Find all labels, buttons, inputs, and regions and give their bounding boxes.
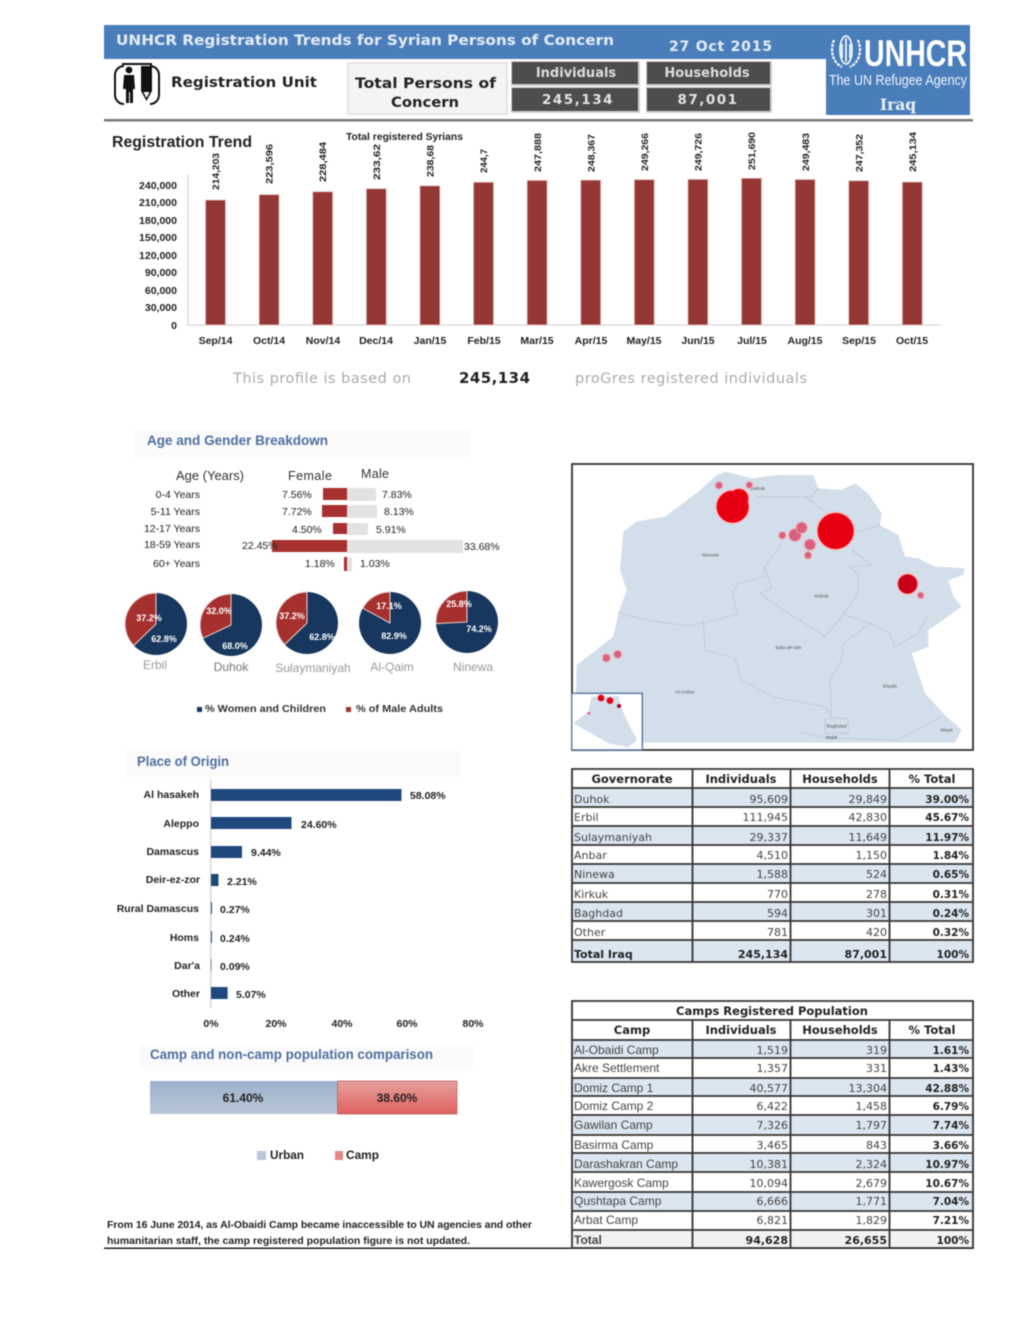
row: Gawilan Camp: 1,797 bbox=[856, 1119, 887, 1132]
row: Kawergosk Camp: Kawergosk Camp bbox=[574, 1176, 669, 1190]
row: Erbil: 45.67% bbox=[925, 812, 969, 824]
y axis labels: 0 bbox=[171, 320, 177, 332]
row: Duhok: Duhok bbox=[574, 793, 610, 806]
bar value labels: 251,690 bbox=[747, 132, 758, 170]
map circles: camp locations bbox=[602, 482, 924, 662]
row: Anbar: 1,150 bbox=[856, 849, 887, 862]
percentage labels: 1.18% bbox=[305, 558, 335, 570]
row: Domiz Camp 1: 13,304 bbox=[848, 1082, 887, 1095]
row: Darashakran Camp: 2,324 bbox=[856, 1158, 887, 1171]
heading: registration trend: Registration Trend bbox=[112, 134, 252, 151]
footnote: From 16 June 2014, as Al-Obaidi Camp became inaccessible to UN agencies and other bbox=[107, 1219, 532, 1231]
row: Kirkuk: Kirkuk bbox=[574, 888, 609, 901]
row: Other: 0.32% bbox=[933, 927, 969, 939]
pie: Al-Qaim: Al-Qaim bbox=[370, 660, 414, 674]
header row: Governorate bbox=[591, 772, 673, 786]
row: Ninewa: 1,588 bbox=[756, 868, 788, 881]
row: Domiz Camp 2: Domiz Camp 2 bbox=[574, 1099, 654, 1113]
origin values: 0.09% bbox=[220, 961, 250, 973]
age labels: 18-59 Years bbox=[144, 539, 200, 551]
origin values: 0.24% bbox=[220, 933, 250, 945]
header row: Individuals bbox=[705, 772, 777, 786]
total persons of concern box: Total Persons of bbox=[355, 76, 497, 92]
row: Duhok: 39.00% bbox=[925, 794, 969, 806]
row: Anbar bbox=[574, 849, 969, 862]
pie: Ninewa bbox=[436, 591, 498, 674]
origin labels: Rural Damascus bbox=[117, 903, 199, 915]
row: Duhok bbox=[574, 793, 969, 806]
percentage labels: 7.72% bbox=[282, 506, 312, 518]
origin axis labels: 40% bbox=[331, 1018, 353, 1030]
map of northern Iraq: Kirkuk bbox=[815, 593, 829, 599]
bar value labels: 248,367 bbox=[586, 134, 598, 172]
bar value labels: 247,888 bbox=[533, 133, 544, 172]
header row: Households bbox=[802, 772, 878, 786]
stacked bar: urban: 61.40% bbox=[223, 1091, 264, 1105]
profile note: This profile is based on bbox=[232, 371, 411, 387]
total persons of concern box bbox=[347, 62, 508, 115]
column headings: Female bbox=[288, 469, 332, 483]
pie: Duhok bbox=[200, 594, 262, 674]
age labels: 0-4 Years bbox=[156, 489, 200, 501]
percentage labels: 1.03% bbox=[360, 558, 390, 570]
row: Al-Obaidi Camp: 319 bbox=[866, 1044, 887, 1057]
column headings: Male bbox=[361, 467, 389, 481]
origin values: 58.08% bbox=[410, 790, 446, 802]
footnote: humanitarian staff, the camp registered population figure is not updated. bbox=[107, 1235, 470, 1247]
row: Erbil bbox=[574, 811, 969, 824]
bar value labels: 249,483 bbox=[801, 133, 812, 171]
individuals value bbox=[511, 87, 640, 113]
pie: Duhok: 68.0% bbox=[222, 641, 248, 651]
age labels bbox=[144, 489, 200, 570]
header row bbox=[614, 1023, 955, 1037]
x axis labels bbox=[199, 335, 928, 347]
map of northern Iraq bbox=[572, 472, 965, 750]
row: Basirma Camp: 843 bbox=[866, 1139, 887, 1152]
percentage labels: 8.13% bbox=[384, 506, 414, 518]
row: Total Iraq: 100% bbox=[937, 949, 969, 961]
row: Darashakran Camp: Darashakran Camp bbox=[574, 1157, 678, 1171]
row: Total: Total bbox=[574, 1233, 602, 1247]
pie: Ninewa: Ninewa bbox=[453, 660, 493, 674]
registration unit label: Registration Unit bbox=[171, 75, 317, 91]
y axis labels: 60,000 bbox=[145, 285, 177, 297]
heading: age and gender: Age and Gender Breakdown bbox=[147, 433, 328, 448]
row: Duhok: 95,609 bbox=[750, 793, 788, 806]
percentage labels: 5.91% bbox=[376, 524, 406, 536]
UNHCR logo block: Iraq bbox=[880, 95, 916, 114]
origin values: 0.27% bbox=[220, 904, 250, 916]
bar value labels: 249,726 bbox=[694, 133, 704, 171]
row: Basirma Camp: 3.66% bbox=[933, 1140, 969, 1152]
row: Akre Settlement: Akre Settlement bbox=[574, 1061, 660, 1075]
map of northern Iraq: Al-Anbar bbox=[675, 689, 695, 695]
origin values: 24.60% bbox=[301, 819, 337, 831]
row: Total Iraq: 245,134 bbox=[738, 948, 788, 961]
row: Erbil: 42,830 bbox=[848, 811, 887, 824]
x axis labels: Jan/15 bbox=[414, 335, 446, 347]
row: Baghdad bbox=[574, 907, 969, 920]
individuals header bbox=[511, 61, 640, 86]
row: Domiz Camp 2 bbox=[574, 1099, 969, 1113]
footnote bbox=[107, 1219, 532, 1247]
header row: % Total bbox=[909, 1023, 955, 1037]
y axis labels: 210,000 bbox=[139, 197, 177, 209]
map of northern Iraq: Babil bbox=[826, 735, 837, 741]
origin labels bbox=[117, 789, 200, 1000]
pie: Erbil bbox=[125, 593, 187, 672]
row: Akre Settlement: 331 bbox=[866, 1062, 887, 1075]
row: Domiz Camp 2: 6,422 bbox=[756, 1100, 788, 1113]
pie: Al-Qaim: 82.9% bbox=[381, 631, 407, 641]
profile note: proGres registered individuals bbox=[575, 371, 807, 387]
x axis labels: Jul/15 bbox=[737, 335, 767, 347]
x axis labels: Sep/15 bbox=[842, 335, 876, 347]
header row: Individuals bbox=[705, 1023, 777, 1037]
table: governorate bbox=[572, 769, 973, 962]
header row: Camp bbox=[614, 1023, 650, 1037]
row: Al-Obaidi Camp bbox=[574, 1043, 969, 1057]
column headings: Age (Years) bbox=[176, 469, 244, 483]
row: Other: Other bbox=[574, 926, 606, 939]
origin labels: Homs bbox=[170, 932, 199, 944]
female bars bbox=[272, 488, 347, 571]
origin bars bbox=[211, 789, 402, 999]
row: Ninewa bbox=[574, 868, 969, 881]
x axis labels: Sep/14 bbox=[199, 335, 233, 347]
row: Sulaymaniyah bbox=[574, 831, 969, 844]
origin values: 9.44% bbox=[251, 847, 281, 859]
row: Domiz Camp 2: 6.79% bbox=[933, 1101, 969, 1113]
pie: Erbil: 37.2% bbox=[136, 613, 162, 623]
x axis labels: Aug/15 bbox=[787, 335, 823, 347]
households header: Households bbox=[664, 66, 750, 81]
stacked bar: camp: 38.60% bbox=[377, 1091, 418, 1105]
row: Sulaymaniyah: 11,649 bbox=[848, 831, 887, 844]
origin axis labels: 20% bbox=[265, 1018, 287, 1030]
map of northern Iraq: Dahuk bbox=[750, 486, 765, 492]
row: Qushtapa Camp: 7.04% bbox=[933, 1196, 969, 1208]
row: Arbat Camp: 7.21% bbox=[933, 1215, 969, 1227]
header bbox=[104, 25, 970, 115]
y axis labels: 90,000 bbox=[145, 267, 177, 279]
row: Domiz Camp 1 bbox=[574, 1081, 969, 1095]
row: Kirkuk: 0.31% bbox=[933, 889, 969, 901]
title banner: 27 Oct 2015 bbox=[669, 39, 772, 55]
y axis labels: 180,000 bbox=[139, 215, 177, 227]
y axis labels: 150,000 bbox=[139, 232, 177, 244]
row: Other bbox=[574, 926, 969, 939]
origin labels: Deir-ez-zor bbox=[146, 874, 200, 886]
row: Qushtapa Camp: 1,771 bbox=[856, 1195, 887, 1208]
pie: Sulaymaniyah: Sulaymaniyah bbox=[275, 661, 351, 675]
row: Kirkuk: 278 bbox=[866, 888, 887, 901]
row: Kirkuk: 770 bbox=[767, 888, 788, 901]
bar value labels: 247,352 bbox=[854, 134, 866, 172]
bar value labels: 228,484 bbox=[318, 141, 329, 182]
row: Al-Obaidi Camp: 1,519 bbox=[756, 1044, 788, 1057]
households header bbox=[646, 61, 772, 86]
percentage labels: 4.50% bbox=[292, 524, 322, 536]
percentage labels: 7.83% bbox=[382, 489, 412, 501]
pie: Duhok: Duhok bbox=[214, 660, 249, 674]
pie: Sulaymaniyah: 62.8% bbox=[309, 632, 335, 642]
map inset bbox=[572, 693, 642, 750]
panel: camp and non-camp comparison bbox=[140, 1045, 473, 1162]
bar chart: monthly registrations bbox=[206, 178, 922, 325]
row: Qushtapa Camp bbox=[574, 1194, 969, 1208]
bar value labels: 244,7 bbox=[479, 149, 490, 173]
row: Arbat Camp: Arbat Camp bbox=[574, 1213, 638, 1227]
header row: Households bbox=[802, 1023, 878, 1037]
y axis labels: 30,000 bbox=[145, 302, 177, 314]
row: Arbat Camp: 1,829 bbox=[856, 1214, 887, 1227]
row: Duhok: 29,849 bbox=[848, 793, 887, 806]
row: Anbar: 4,510 bbox=[756, 849, 788, 862]
row: Gawilan Camp: Gawilan Camp bbox=[574, 1118, 653, 1132]
row: Akre Settlement: 1.43% bbox=[933, 1063, 969, 1075]
origin axis labels: 60% bbox=[396, 1018, 418, 1030]
table: camps registered population bbox=[572, 1001, 973, 1248]
row: Total: 94,628 bbox=[746, 1234, 788, 1247]
row: Domiz Camp 2: 1,458 bbox=[856, 1100, 887, 1113]
row: Total Iraq: 87,001 bbox=[845, 948, 887, 961]
chart title: Total registered Syrians bbox=[346, 132, 463, 143]
row: Erbil: 111,945 bbox=[742, 811, 788, 824]
map of northern Iraq: Sala ah-Din bbox=[775, 645, 802, 651]
column headings bbox=[176, 467, 389, 483]
heading: place of origin: Place of Origin bbox=[137, 754, 229, 769]
heading: camp comparison bbox=[140, 1045, 473, 1068]
row: Darashakran Camp: 10,381 bbox=[750, 1158, 788, 1171]
row: Darashakran Camp bbox=[574, 1157, 969, 1171]
y axis labels: 120,000 bbox=[139, 250, 177, 262]
row: Gawilan Camp: 7.74% bbox=[933, 1120, 969, 1132]
row: Total: 100% bbox=[937, 1235, 969, 1247]
percentage labels: 33.68% bbox=[464, 541, 500, 553]
individuals header: Individuals bbox=[536, 66, 616, 81]
row: Sulaymaniyah: 11.97% bbox=[925, 832, 969, 844]
row: Basirma Camp: Basirma Camp bbox=[574, 1138, 654, 1152]
profile note: 245,134 bbox=[459, 369, 530, 387]
households value bbox=[646, 87, 772, 113]
map of northern Iraq: Ninewa bbox=[702, 553, 719, 559]
x axis labels: Oct/14 bbox=[253, 335, 285, 347]
row: Kawergosk Camp: 10.67% bbox=[925, 1178, 969, 1190]
bar value labels: 233,62 bbox=[372, 144, 383, 180]
table shaded rows bbox=[572, 788, 973, 962]
icon: registration unit person and pencil bbox=[115, 63, 159, 107]
pie: Duhok: 32.0% bbox=[206, 606, 232, 616]
panel: age and gender breakdown bbox=[125, 430, 500, 715]
bar value labels: 249,266 bbox=[640, 133, 651, 171]
origin values bbox=[220, 790, 446, 1001]
row: Anbar: 1.84% bbox=[933, 850, 969, 862]
row: Anbar: Anbar bbox=[574, 849, 607, 862]
x axis labels: Nov/14 bbox=[306, 335, 340, 347]
bar value labels: 214,203 bbox=[211, 153, 222, 190]
male bars bbox=[347, 488, 463, 571]
origin values: 2.21% bbox=[227, 876, 257, 888]
pie legend: % of Male Adults bbox=[356, 703, 443, 715]
UNHCR logo block: UNHCR bbox=[864, 33, 967, 74]
origin labels: Damascus bbox=[146, 846, 199, 858]
bar value labels: 245,134 bbox=[908, 131, 919, 172]
origin labels: Al hasakeh bbox=[144, 789, 199, 801]
map of northern Iraq: Baghdad bbox=[827, 723, 847, 729]
percentage labels: 7.56% bbox=[282, 489, 312, 501]
table shaded rows bbox=[572, 1040, 973, 1248]
x axis labels: May/15 bbox=[626, 335, 662, 347]
row: Total bbox=[574, 1233, 969, 1247]
heading: camp comparison: Camp and non-camp population comparison bbox=[150, 1047, 433, 1062]
pie legend bbox=[197, 703, 443, 715]
x axis labels: Apr/15 bbox=[575, 335, 607, 347]
pie: Al-Qaim bbox=[359, 592, 421, 674]
percentage labels: 22.45% bbox=[242, 540, 278, 552]
heading: place of origin bbox=[125, 751, 460, 776]
age labels: 60+ Years bbox=[153, 558, 200, 570]
percentage labels bbox=[242, 489, 500, 570]
row: Erbil: Erbil bbox=[574, 811, 599, 824]
pie: Erbil: Erbil bbox=[143, 658, 167, 672]
camp legend: Camp bbox=[346, 1150, 379, 1162]
row: Other: 781 bbox=[767, 926, 788, 939]
row: Sulaymaniyah: Sulaymaniyah bbox=[574, 831, 652, 844]
row: Darashakran Camp: 10.97% bbox=[925, 1159, 969, 1171]
origin axis labels: 80% bbox=[462, 1018, 484, 1030]
map panel bbox=[572, 464, 973, 750]
bar value labels: 238,68 bbox=[426, 145, 436, 177]
camp legend bbox=[257, 1150, 379, 1162]
row: Kawergosk Camp: 2,679 bbox=[856, 1177, 887, 1190]
row: Gawilan Camp: 7,326 bbox=[756, 1119, 788, 1132]
row: Kirkuk bbox=[574, 888, 969, 901]
row: Kawergosk Camp: 10,094 bbox=[750, 1177, 788, 1190]
row: Arbat Camp: 6,821 bbox=[756, 1214, 788, 1227]
heading: age and gender bbox=[135, 430, 470, 457]
row: Total Iraq bbox=[574, 948, 969, 961]
origin labels: Dar'a bbox=[174, 960, 200, 972]
row: Al-Obaidi Camp: 1.61% bbox=[933, 1045, 969, 1057]
title banner bbox=[104, 25, 838, 59]
row: Domiz Camp 1: 42.88% bbox=[925, 1083, 969, 1095]
age labels: 12-17 Years bbox=[144, 523, 200, 535]
UNHCR logo block bbox=[826, 25, 970, 115]
row: Al-Obaidi Camp: Al-Obaidi Camp bbox=[574, 1043, 659, 1057]
panel: registration trend bbox=[112, 131, 940, 347]
x axis labels: Oct/15 bbox=[896, 335, 928, 347]
row: Baghdad: 0.24% bbox=[933, 908, 969, 920]
row: Basirma Camp bbox=[574, 1138, 969, 1152]
row: Baghdad: 301 bbox=[866, 907, 887, 920]
row: Sulaymaniyah: 29,337 bbox=[750, 831, 788, 844]
row: Ninewa: 0.65% bbox=[933, 869, 969, 881]
origin axis labels bbox=[203, 1018, 484, 1030]
bar value labels: 223,596 bbox=[264, 144, 276, 184]
row: Total Iraq: Total Iraq bbox=[574, 948, 633, 961]
row: Gawilan Camp bbox=[574, 1118, 969, 1132]
total persons of concern box: Concern bbox=[391, 95, 459, 111]
age labels: 5-11 Years bbox=[151, 506, 200, 518]
stacked bar: camp bbox=[338, 1081, 457, 1114]
origin labels: Other bbox=[172, 988, 200, 1000]
x axis labels: Jun/15 bbox=[681, 335, 715, 347]
row: Qushtapa Camp: Qushtapa Camp bbox=[574, 1194, 662, 1208]
households value: 87,001 bbox=[677, 92, 739, 108]
row: Total: 26,655 bbox=[845, 1234, 887, 1247]
y axis labels: 240,000 bbox=[139, 180, 177, 192]
row: Domiz Camp 1: 40,577 bbox=[750, 1082, 788, 1095]
row: Domiz Camp 1: Domiz Camp 1 bbox=[574, 1081, 654, 1095]
x axis labels: Feb/15 bbox=[467, 335, 501, 347]
pie: Al-Qaim: 17.1% bbox=[376, 601, 402, 611]
stacked bar: urban bbox=[150, 1081, 338, 1114]
camp legend: Urban bbox=[270, 1150, 304, 1162]
header row: % Total bbox=[909, 772, 955, 786]
y axis labels bbox=[139, 180, 177, 332]
row: Basirma Camp: 3,465 bbox=[756, 1139, 788, 1152]
pie: Sulaymaniyah bbox=[275, 592, 351, 675]
title banner: UNHCR Registration Trends for Syrian Persons of Concern bbox=[116, 33, 614, 49]
origin axis labels: 0% bbox=[203, 1018, 219, 1030]
origin values: 5.07% bbox=[236, 989, 266, 1001]
row: Akre Settlement bbox=[574, 1061, 969, 1075]
row: Akre Settlement: 1,357 bbox=[756, 1062, 788, 1075]
row: Kawergosk Camp bbox=[574, 1176, 969, 1190]
UNHCR logo block: The UN Refugee Agency bbox=[829, 72, 967, 89]
pie: Ninewa: 25.8% bbox=[446, 599, 472, 609]
panel: place of origin bbox=[117, 751, 484, 1030]
pie: Ninewa: 74.2% bbox=[466, 624, 492, 634]
table title: Camps Registered Population bbox=[676, 1004, 868, 1018]
pie: Sulaymaniyah: 37.2% bbox=[279, 611, 305, 621]
map of northern Iraq: Wasit bbox=[940, 728, 953, 734]
individuals value: 245,134 bbox=[542, 92, 614, 108]
x axis labels: Mar/15 bbox=[520, 335, 554, 347]
row: Baghdad: Baghdad bbox=[574, 907, 623, 920]
row: Baghdad: 594 bbox=[767, 907, 788, 920]
pie: Erbil: 62.8% bbox=[151, 634, 177, 644]
row: Arbat Camp bbox=[574, 1213, 969, 1227]
row: Ninewa: Ninewa bbox=[574, 868, 615, 881]
row: Qushtapa Camp: 6,666 bbox=[756, 1195, 788, 1208]
map of northern Iraq: Diyala bbox=[883, 684, 897, 690]
bar value labels bbox=[211, 131, 919, 190]
row: Ninewa: 524 bbox=[866, 868, 887, 881]
pie legend: % Women and Children bbox=[205, 703, 326, 715]
origin labels: Aleppo bbox=[163, 818, 199, 830]
row: Other: 420 bbox=[866, 926, 887, 939]
profile note bbox=[232, 369, 807, 387]
header row bbox=[591, 772, 955, 786]
x axis labels: Dec/14 bbox=[359, 335, 393, 347]
